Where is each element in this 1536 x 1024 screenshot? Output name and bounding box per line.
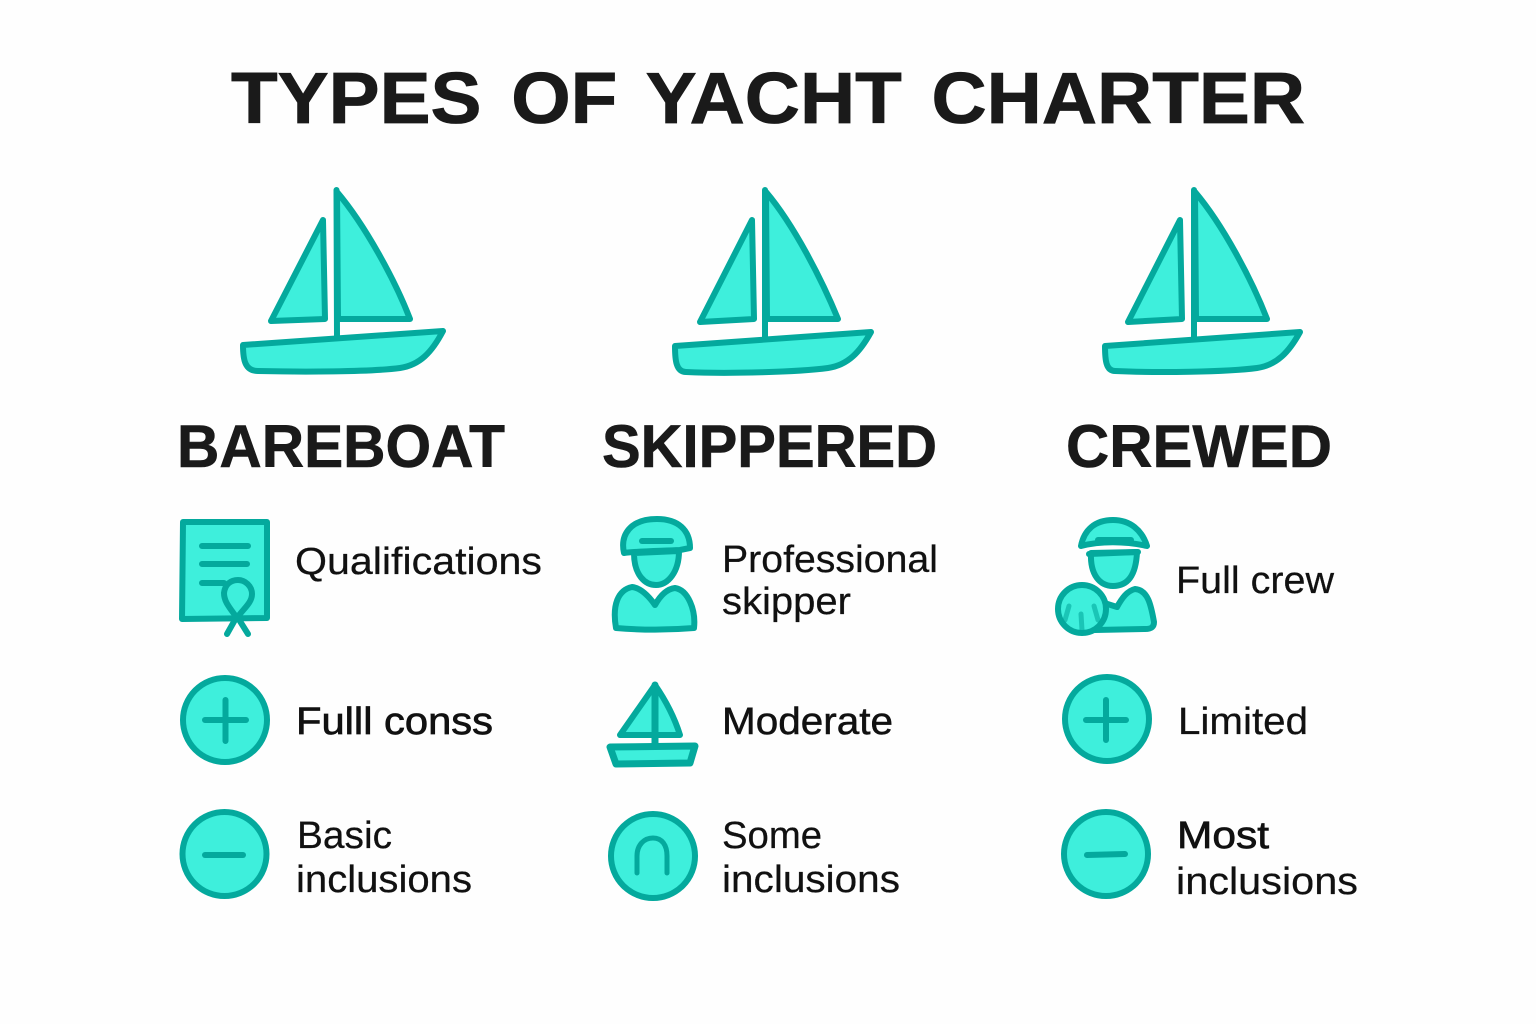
icon: sailboat skippered (675, 190, 871, 373)
item: full crew: Full crew (1176, 560, 1335, 602)
panel: bareboat (177, 190, 542, 901)
icon: plus circle (1065, 677, 1149, 761)
item: most inclusions: inclusions (1176, 861, 1358, 903)
title: TYPES OF YACHT CHARTER (231, 59, 1305, 139)
item: some inclusions (722, 815, 900, 901)
icon: sailboat bareboat (243, 190, 443, 372)
item: basic inclusions: Basic (297, 815, 392, 857)
icon: arch circle (611, 814, 695, 898)
item: limited: Limited (1178, 701, 1308, 743)
icon: crew (1058, 520, 1154, 633)
item: professional skipper: Professional (722, 539, 938, 581)
heading: bareboat: BAREBOAT (177, 413, 505, 480)
icon: minus circle (182, 812, 266, 896)
item: basic inclusions: inclusions (296, 859, 472, 901)
icon: minus circle (1064, 812, 1148, 896)
heading: skippered: SKIPPERED (602, 413, 937, 480)
item: professional skipper: skipper (722, 581, 851, 623)
heading: crewed: CREWED (1066, 413, 1332, 480)
item: most inclusions: Most (1177, 815, 1269, 857)
icon: plus circle (183, 678, 267, 762)
item: moderate: Moderate (722, 701, 893, 743)
icon: skipper (615, 519, 694, 630)
item: some inclusions: Some (722, 815, 822, 857)
item: basic inclusions (296, 815, 472, 901)
item: qualifications: Qualifications (295, 541, 542, 583)
icon: sailboat crewed (1105, 190, 1300, 372)
panel: crewed (1058, 190, 1358, 903)
panel: skippered (602, 190, 938, 901)
item: most inclusions (1176, 815, 1358, 903)
icon: certificate (182, 522, 267, 634)
item: professional skipper (722, 539, 938, 623)
item: some inclusions: inclusions (722, 859, 900, 901)
icon: small sailboat (610, 685, 695, 764)
item: full cons: Fulll conss (296, 701, 493, 743)
